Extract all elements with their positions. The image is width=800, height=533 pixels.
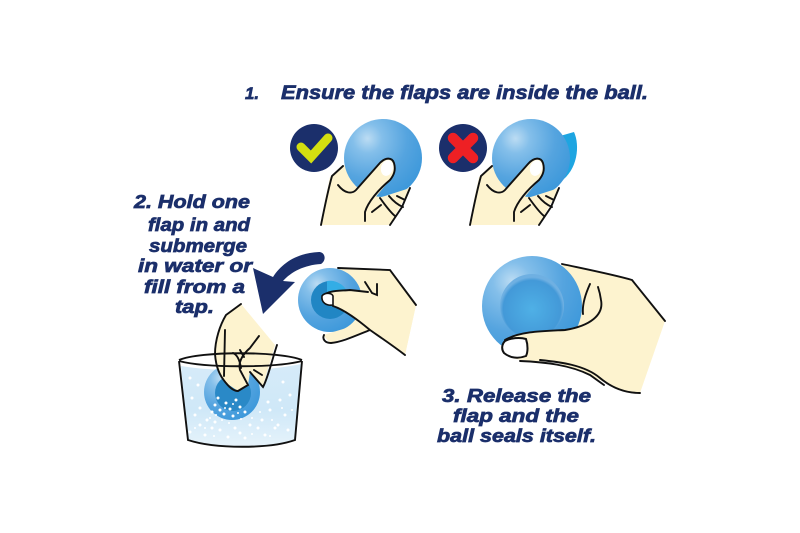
hand in cup	[215, 304, 277, 391]
heading: step 1: Ensure the flaps are inside the ball.	[281, 83, 648, 104]
panel: hand releasing ball	[482, 256, 665, 393]
heading: step 2	[133, 192, 253, 317]
fingers	[322, 284, 416, 355]
heading: step 3: flap and the	[453, 406, 579, 426]
heading: step 3: ball seals itself.	[437, 426, 596, 446]
thumbnail	[502, 338, 528, 358]
thumb	[505, 300, 640, 380]
heading: step 3	[437, 386, 596, 446]
heading: step 2: submerge	[149, 236, 247, 256]
heading: step 2: tap.	[175, 297, 214, 317]
heading: step 2: fill from a	[144, 277, 245, 297]
heading: step 2: in water or	[138, 256, 253, 276]
thumbnail	[322, 293, 333, 305]
panel: wrong flaps outside	[439, 119, 577, 225]
heading: step 2: 2. Hold one	[133, 192, 250, 212]
hand and ball	[321, 119, 422, 225]
hand and ball	[470, 119, 570, 225]
ball with flap	[298, 268, 362, 332]
arrow: curved pointer	[253, 252, 325, 314]
ball	[482, 256, 582, 356]
panel: cup of water	[179, 304, 302, 447]
panel: correct flaps inside	[290, 119, 422, 225]
heading: step 3: 3. Release the	[442, 386, 591, 406]
heading: step 2: flap in and	[148, 215, 251, 235]
hand	[525, 264, 665, 393]
water	[181, 364, 301, 447]
flap	[560, 132, 577, 182]
panel: hand holding flap	[298, 268, 416, 355]
bubbles	[190, 378, 290, 438]
cup outline	[179, 353, 302, 447]
ball in water	[204, 364, 260, 420]
icon: check badge	[290, 124, 338, 172]
heading: step 1: 1.	[245, 84, 259, 103]
icon: cross badge	[439, 124, 487, 172]
